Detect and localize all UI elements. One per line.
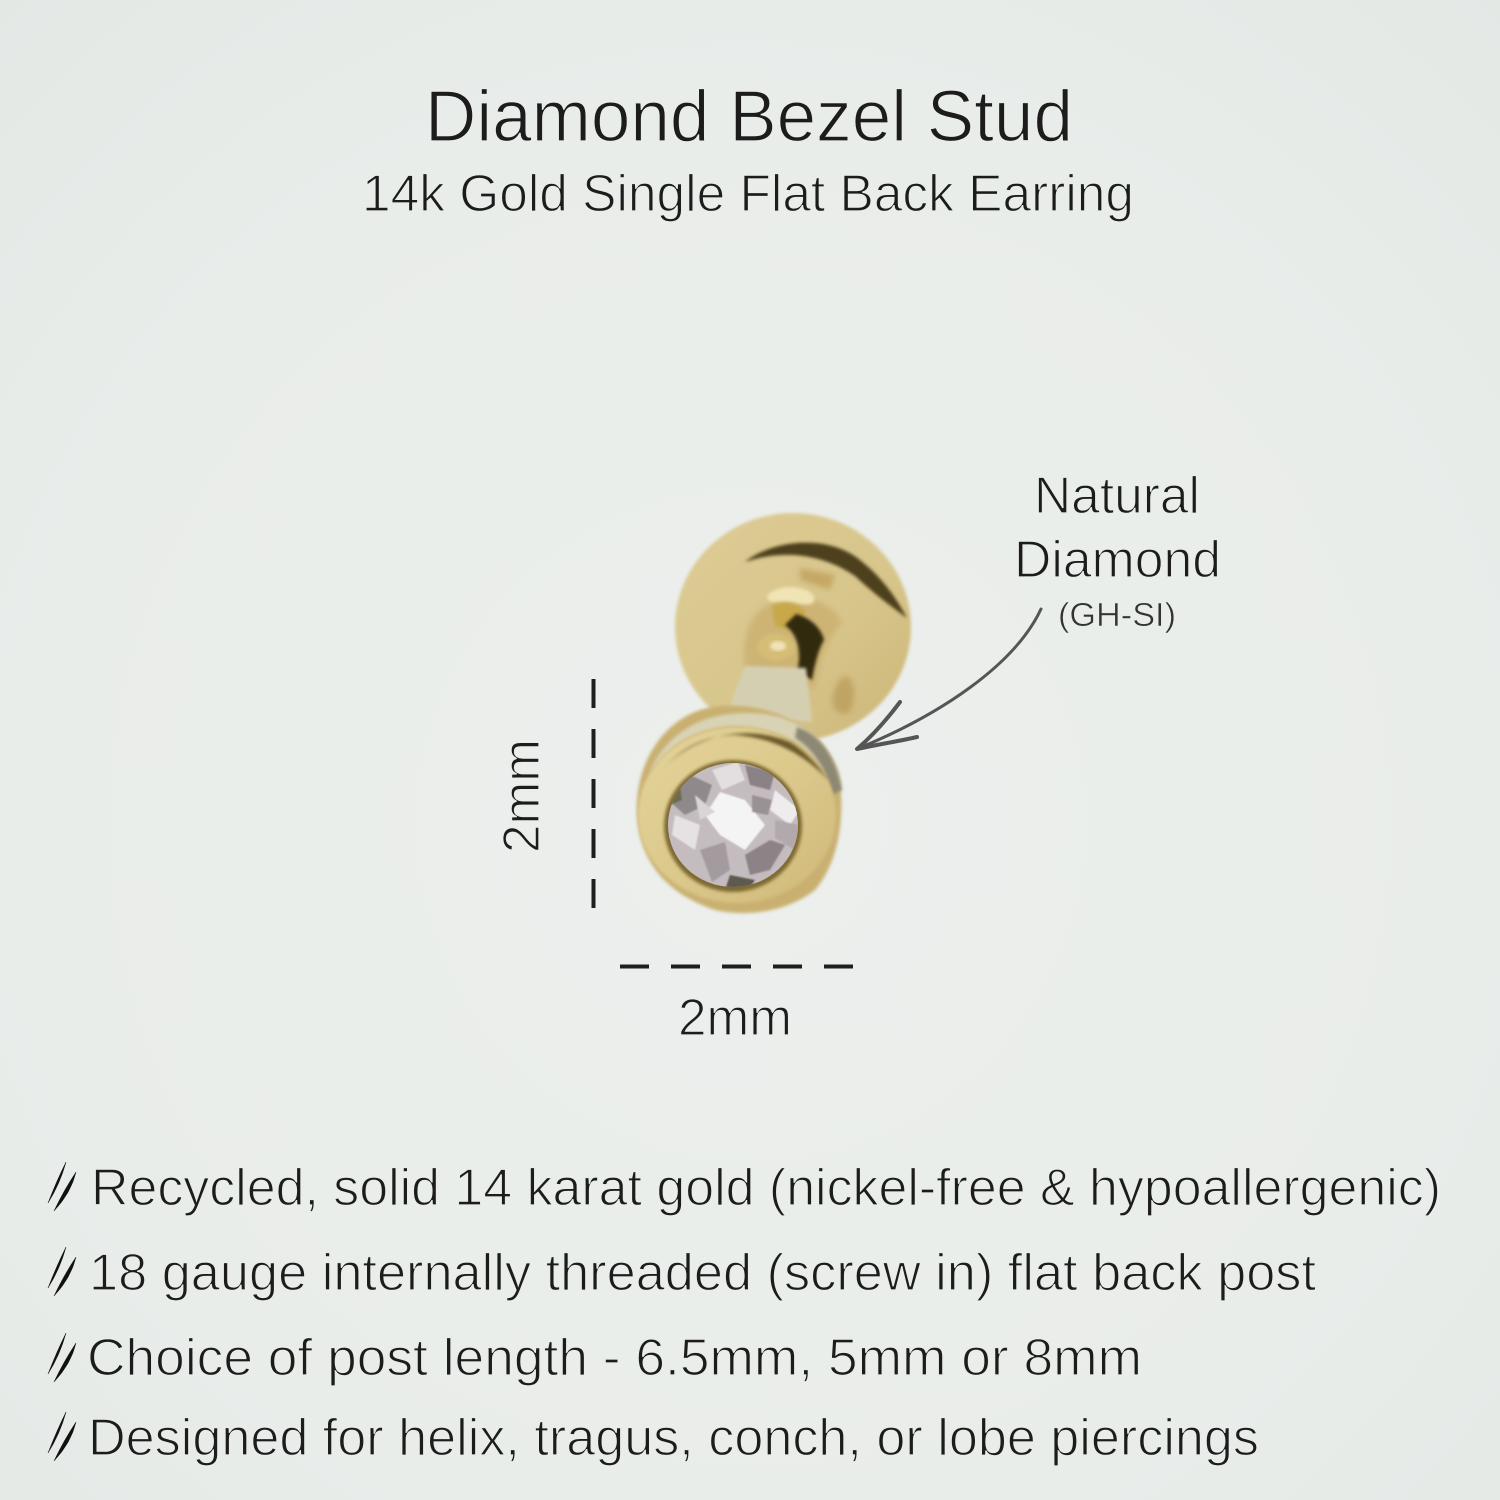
icon: diamond stud earring [637, 513, 911, 913]
horizontal dimension label: 2mm [678, 989, 792, 1047]
vertical dimension label: 2mm [493, 739, 551, 853]
feature 4: Designed for helix, tragus, conch, or lobe piercings [88, 1409, 1259, 1467]
feature 1: Recycled, solid 14 karat gold (nickel-free & hypoallergenic) [91, 1159, 1441, 1217]
title: Diamond Bezel Stud [425, 77, 1073, 157]
diamond label: (GH-SI) [1058, 596, 1176, 633]
earring post [726, 587, 842, 722]
diamond label: Diamond [1014, 531, 1221, 589]
feature 2: 18 gauge internally threaded (screw in) flat back post [89, 1244, 1317, 1302]
subtitle: 14k Gold Single Flat Back Earring [362, 165, 1134, 223]
feature 3: Choice of post length - 6.5mm, 5mm or 8mm [87, 1329, 1142, 1387]
diamond [660, 755, 806, 895]
bezel face [638, 727, 836, 903]
vertical dimension line [592, 679, 596, 912]
feature list [48, 1159, 1441, 1467]
diamond label: Natural [1034, 467, 1200, 525]
earring back disc [675, 513, 911, 741]
diamond label [1014, 467, 1221, 633]
arrow to diamond [857, 609, 1041, 749]
bezel outer rim [637, 706, 841, 913]
horizontal dimension line [620, 964, 853, 968]
